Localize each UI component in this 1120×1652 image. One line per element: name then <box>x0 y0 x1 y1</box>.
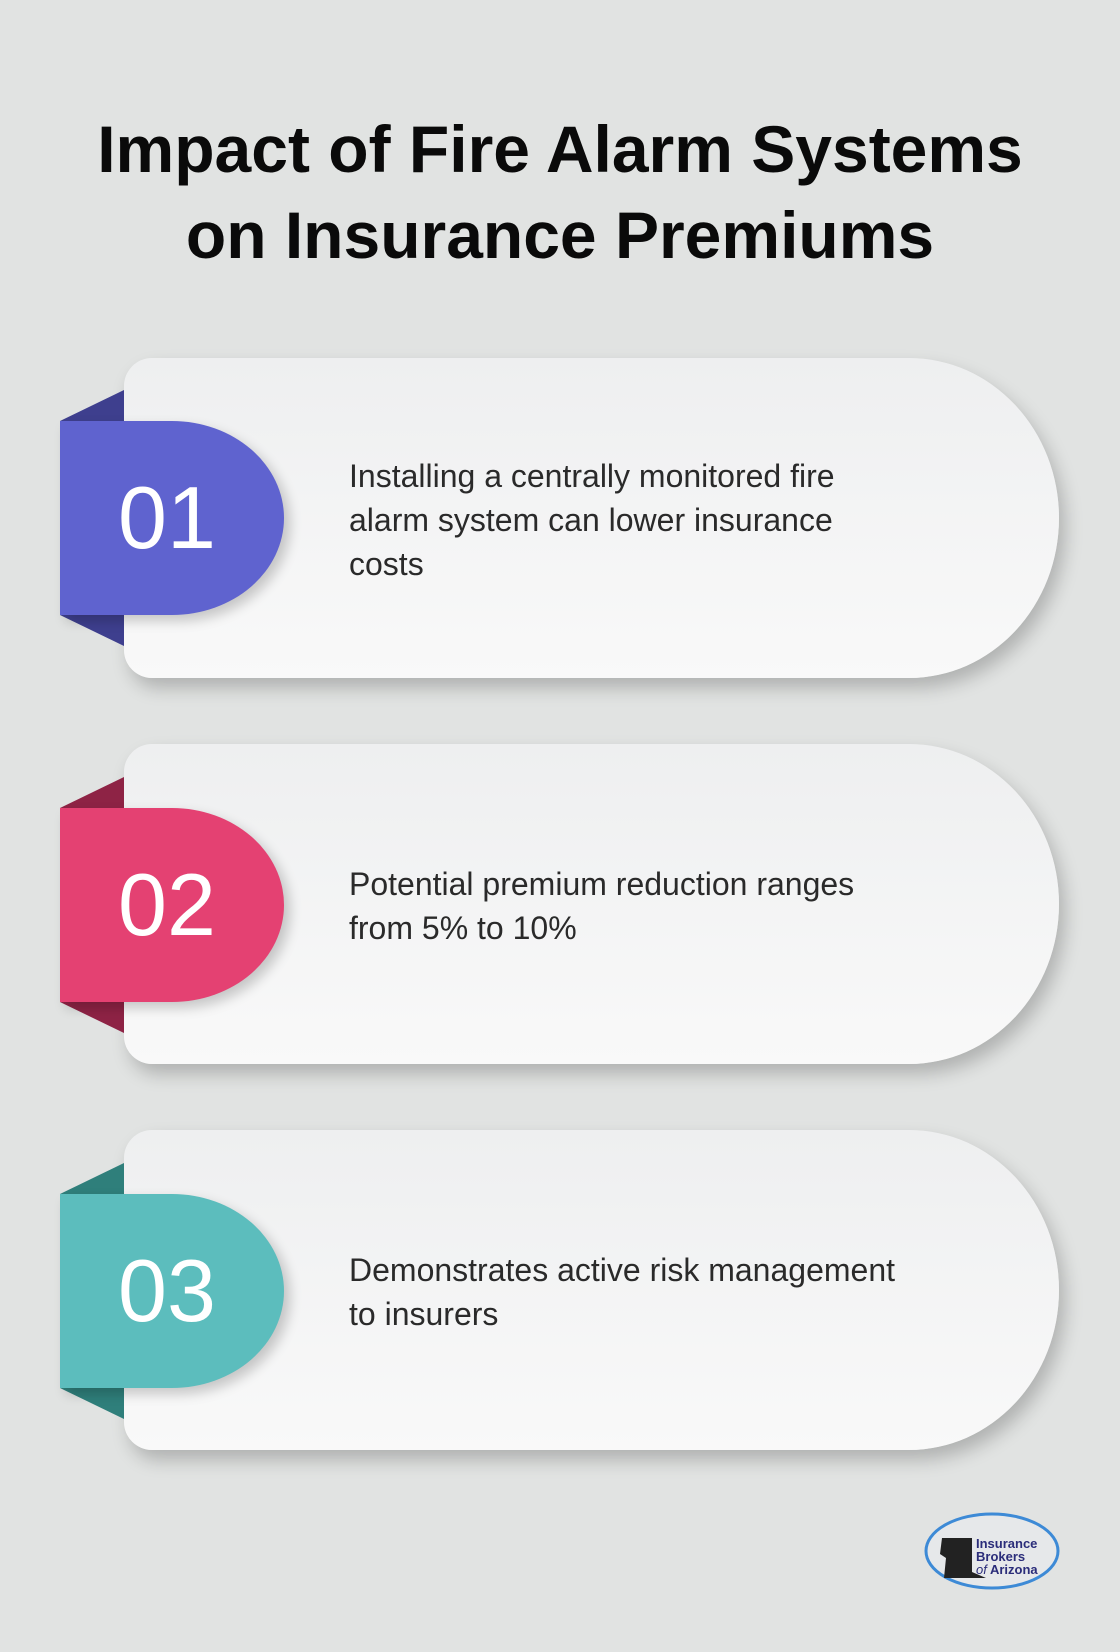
title <box>97 112 1023 272</box>
logo: of Arizona <box>976 1562 1038 1577</box>
text: step 2: Potential premium reduction ranges from 5% to 10% <box>349 866 854 946</box>
tab fold bottom 3 <box>60 1388 124 1419</box>
tab fold bottom 1 <box>60 615 124 646</box>
badge 01 <box>60 421 284 615</box>
text: step 3: Demonstrates active risk management to insurers <box>349 1252 895 1332</box>
tab fold top 2 <box>60 777 124 808</box>
tab fold top 3 <box>60 1163 124 1194</box>
tab fold bottom 2 <box>60 1002 124 1033</box>
logo: Insurance <box>976 1536 1037 1551</box>
panel: step 1 <box>124 358 1059 678</box>
title: Impact of Fire Alarm Systems <box>97 112 1023 186</box>
logo: Brokers <box>976 1549 1025 1564</box>
badge 02: 02 <box>118 855 216 954</box>
title: on Insurance Premiums <box>186 198 934 272</box>
logo <box>924 1512 1060 1590</box>
badge 03: 03 <box>118 1241 216 1340</box>
panel: step 2 <box>124 744 1059 1064</box>
badge 03 <box>60 1194 284 1388</box>
panel: step 3 <box>124 1130 1059 1450</box>
badge 01: 01 <box>118 468 216 567</box>
text: step 1: Installing a centrally monitored fire alarm system can lower insurance costs <box>349 458 835 582</box>
badge 02 <box>60 808 284 1002</box>
tab fold top 1 <box>60 390 124 421</box>
